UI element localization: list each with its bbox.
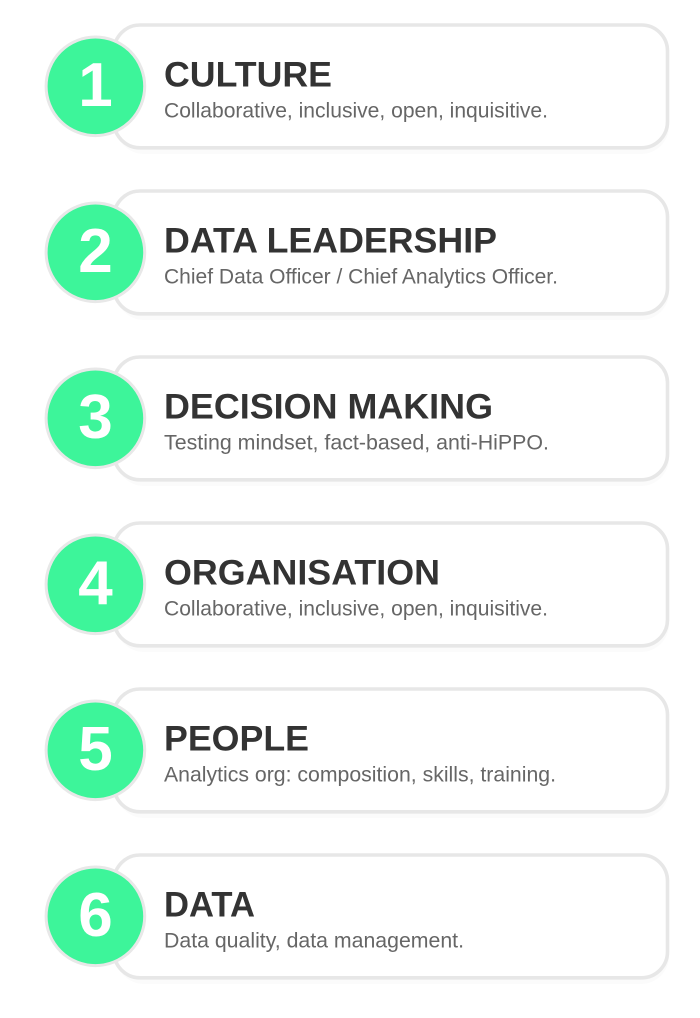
number 5: 5 xyxy=(78,715,113,784)
card 6 xyxy=(114,855,668,978)
description 5: Analytics org: composition, skills, training. xyxy=(164,764,556,786)
number 6: 6 xyxy=(78,881,113,950)
item 4: organisation xyxy=(46,523,669,652)
description 4: Collaborative, inclusive, open, inquisitive. xyxy=(164,598,548,620)
number badge 5 xyxy=(46,701,145,800)
card 2 xyxy=(114,191,668,314)
card 5 xyxy=(114,689,668,812)
heading 1: CULTURE xyxy=(164,56,332,95)
heading 6: DATA xyxy=(164,886,255,925)
number 1: 1 xyxy=(78,51,113,120)
item 2: data leadership xyxy=(46,191,669,320)
number badge 3 xyxy=(46,369,145,468)
description 2: Chief Data Officer / Chief Analytics Officer. xyxy=(164,266,558,288)
description 3: Testing mindset, fact-based, anti-HiPPO. xyxy=(164,432,549,454)
item 1: culture xyxy=(46,25,669,154)
number badge 4 xyxy=(46,535,145,634)
card 4 xyxy=(114,523,668,646)
number badge 2 xyxy=(46,203,145,302)
card 1 xyxy=(114,25,668,148)
heading 2: DATA LEADERSHIP xyxy=(164,222,497,261)
heading 5: PEOPLE xyxy=(164,720,309,759)
card 3 xyxy=(114,357,668,480)
description 6: Data quality, data management. xyxy=(164,930,464,952)
number badge 1 xyxy=(46,37,145,136)
number badge 6 xyxy=(46,867,145,966)
number 4: 4 xyxy=(78,549,113,618)
item 5: people xyxy=(46,689,669,818)
item 3: decision making xyxy=(46,357,669,486)
item 6: data xyxy=(46,855,669,984)
heading 3: DECISION MAKING xyxy=(164,388,493,427)
number 2: 2 xyxy=(78,217,113,286)
heading 4: ORGANISATION xyxy=(164,554,440,593)
description 1: Collaborative, inclusive, open, inquisitive. xyxy=(164,100,548,122)
number 3: 3 xyxy=(78,383,113,452)
